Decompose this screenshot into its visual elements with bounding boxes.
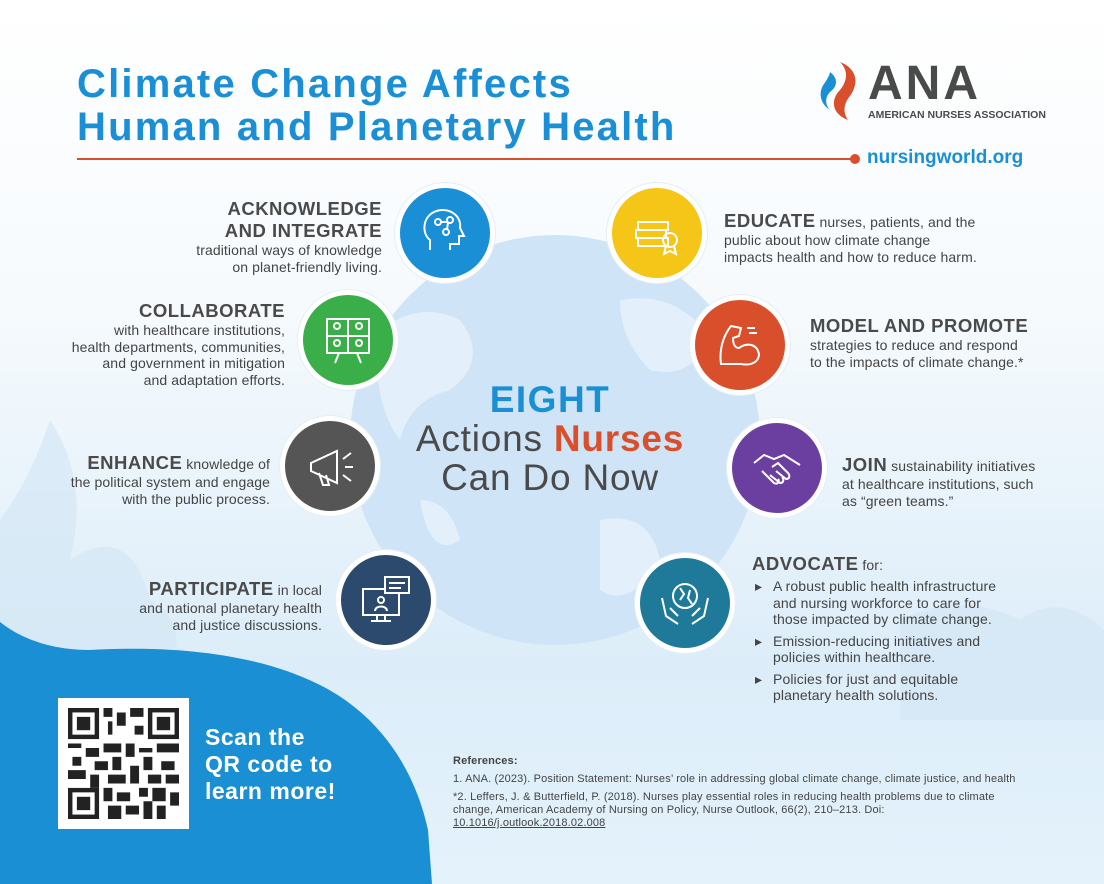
text: join: as “green teams.” [842, 492, 953, 508]
references: 1. ANA. (2023). Position Statement: Nurses’ role in addressing global climate change, climate justice, and health [453, 773, 1016, 785]
text: model: strategies to reduce and respond [810, 337, 1018, 353]
center text: Actions Nurses [416, 418, 684, 459]
divider line [77, 158, 852, 160]
references: 10.1016/j.outlook.2018.02.008 [453, 817, 605, 829]
text: collaborate: and government in mitigation [102, 355, 285, 371]
text: educate: EDUCATE nurses, patients, and the [724, 210, 975, 231]
text: participate [139, 578, 322, 633]
title: Climate Change Affects [77, 62, 573, 106]
icon: advocate [635, 553, 735, 653]
text: enhance: the political system and engage [71, 474, 270, 490]
text: collaborate: COLLABORATE [139, 300, 285, 321]
icon: enhance [280, 416, 380, 516]
text: join: JOIN sustainability initiatives [842, 454, 1035, 475]
logo [820, 57, 1046, 121]
qr code [58, 698, 189, 829]
text: acknowledge: ACKNOWLEDGE [227, 198, 382, 219]
references: *2. Leffers, J. & Butterfield, P. (2018). Nurses play essential roles in reducing health problems due to climate [453, 791, 995, 803]
scan text: learn more! [205, 778, 336, 804]
text: model [810, 315, 1028, 370]
center text: EIGHT [490, 379, 610, 420]
center text [416, 379, 684, 498]
text: collaborate: health departments, communities, [72, 338, 285, 354]
text: advocate: ADVOCATE for: [752, 553, 883, 574]
text: advocate: Emission-reducing initiatives and [773, 632, 980, 648]
text: educate [724, 210, 977, 265]
references: References: [453, 755, 518, 767]
text: acknowledge: traditional ways of knowledge [196, 242, 382, 258]
text: collaborate: and adaptation efforts. [144, 372, 285, 388]
title: Human and Planetary Health [77, 105, 677, 149]
text: educate: public about how climate change [724, 232, 930, 248]
text: acknowledge: AND INTEGRATE [225, 220, 382, 241]
center text: Can Do Now [441, 457, 659, 498]
blue wave [0, 622, 432, 884]
text: model: to the impacts of climate change.* [810, 354, 1024, 370]
text: advocate: planetary health solutions. [773, 687, 938, 703]
text: advocate [752, 553, 996, 703]
title [77, 62, 677, 149]
icon: collaborate [298, 290, 398, 390]
text: participate: PARTICIPATE in local [149, 578, 322, 599]
text: acknowledge: on planet-friendly living. [232, 258, 382, 274]
text: educate: impacts health and how to reduce harm. [724, 248, 977, 264]
scan text: Scan the [205, 724, 305, 750]
logo: ANA [868, 57, 981, 110]
text: collaborate: with healthcare institutions, [114, 322, 285, 338]
text: enhance [70, 452, 270, 507]
icon: participate [336, 550, 436, 650]
icon: join [727, 418, 827, 518]
logo: AMERICAN NURSES ASSOCIATION [868, 109, 1046, 121]
text: join: at healthcare institutions, such [842, 476, 1034, 492]
references [453, 755, 1016, 829]
text: advocate: policies within healthcare. [773, 649, 935, 665]
references: change, American Academy of Nursing on Policy, Nurse Outlook, 66(2), 210–213. Doi: [453, 804, 885, 816]
text: model: MODEL AND PROMOTE [810, 315, 1028, 336]
scan text: QR code to [205, 751, 333, 777]
icon: educate [607, 183, 707, 283]
url: nursingworld.org [867, 147, 1023, 168]
text: advocate: A robust public health infrastructure [773, 578, 996, 594]
text: enhance: ENHANCE knowledge of [87, 452, 270, 473]
text: join [842, 454, 1035, 509]
text: enhance: with the public process. [122, 490, 270, 506]
text: advocate: Policies for just and equitable [773, 670, 958, 686]
icon: model [690, 295, 790, 395]
text: advocate: and nursing workforce to care for [773, 594, 981, 610]
text: acknowledge [196, 198, 382, 275]
scan text [205, 724, 336, 804]
text: participate: and justice discussions. [173, 616, 322, 632]
text: collaborate [72, 300, 285, 388]
icon: acknowledge [395, 183, 495, 283]
text: advocate: those impacted by climate change. [773, 611, 992, 627]
text: participate: and national planetary health [139, 600, 322, 616]
